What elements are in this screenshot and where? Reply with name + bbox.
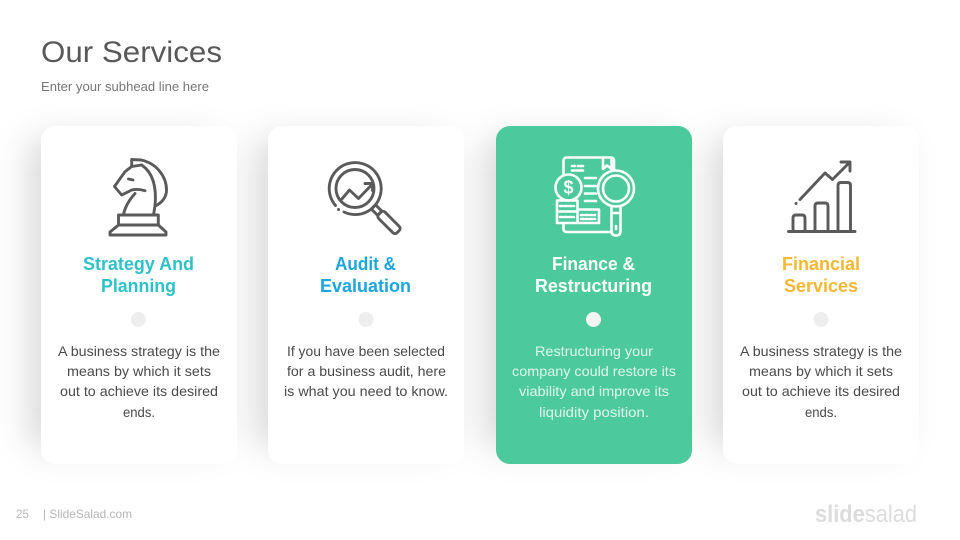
text: strategy description: ends. [123,404,155,420]
text: strategy description: means by which it sets [67,363,211,379]
text: audit description: If you have been selected [287,343,445,359]
dot marker [814,312,828,327]
dot marker [131,312,146,327]
icon: financial report with magnifier [556,158,634,236]
icon: chess knight [110,160,166,235]
heading: financial services: Financial [782,254,860,274]
text: finance description: liquidity position. [539,404,649,420]
text: strategy description: A business strategy is the [58,343,220,359]
panel: financial services [723,126,919,464]
text: audit description: for a business audit, here [287,363,446,379]
heading: finance and restructuring: Restructuring [535,276,652,296]
text: audit description: is what you need to know. [284,383,448,399]
text: strategy description [58,343,220,420]
heading: strategy and planning: Strategy And [83,254,194,274]
text: financial services description: out to achieve its desired [742,383,900,399]
heading: strategy and planning: Planning [101,276,176,296]
panel: strategy and planning [41,126,237,464]
dot marker [586,312,601,327]
footer source: | SlideSalad.com [43,507,132,521]
text: audit description [284,343,448,399]
text: finance description: Restructuring your [535,343,653,359]
heading: audit and evaluation: Audit & [335,254,396,274]
panel: audit and evaluation [268,126,464,464]
icon: rising bar chart [788,162,855,232]
text: financial services description: A business strategy is the [740,343,902,359]
subhead: Enter your subhead line here [41,79,209,94]
text: financial services description: ends. [805,404,837,420]
icon: magnifier with chart [329,163,401,235]
heading: finance and restructuring [535,254,652,296]
text: finance description: viability and improve its [519,383,669,399]
heading: finance and restructuring: Finance & [552,254,635,274]
icon: dollar sign: $ [563,178,574,198]
title: Our Services [41,36,222,69]
logo: slidesalad: slidesalad [815,501,917,528]
text: finance description: company could restore its [512,363,676,379]
heading: strategy and planning [83,254,194,296]
page number: 25 [16,507,29,521]
text: financial services description [740,343,902,420]
text: financial services description: means by which it sets [749,363,893,379]
heading: audit and evaluation: Evaluation [320,276,411,296]
heading: audit and evaluation [320,254,411,296]
text: finance description [512,343,676,420]
panel: finance and restructuring [496,126,692,464]
heading: financial services: Services [784,276,858,296]
text: strategy description: out to achieve its desired [60,383,218,399]
dot marker [358,312,374,327]
heading: financial services [782,254,860,296]
